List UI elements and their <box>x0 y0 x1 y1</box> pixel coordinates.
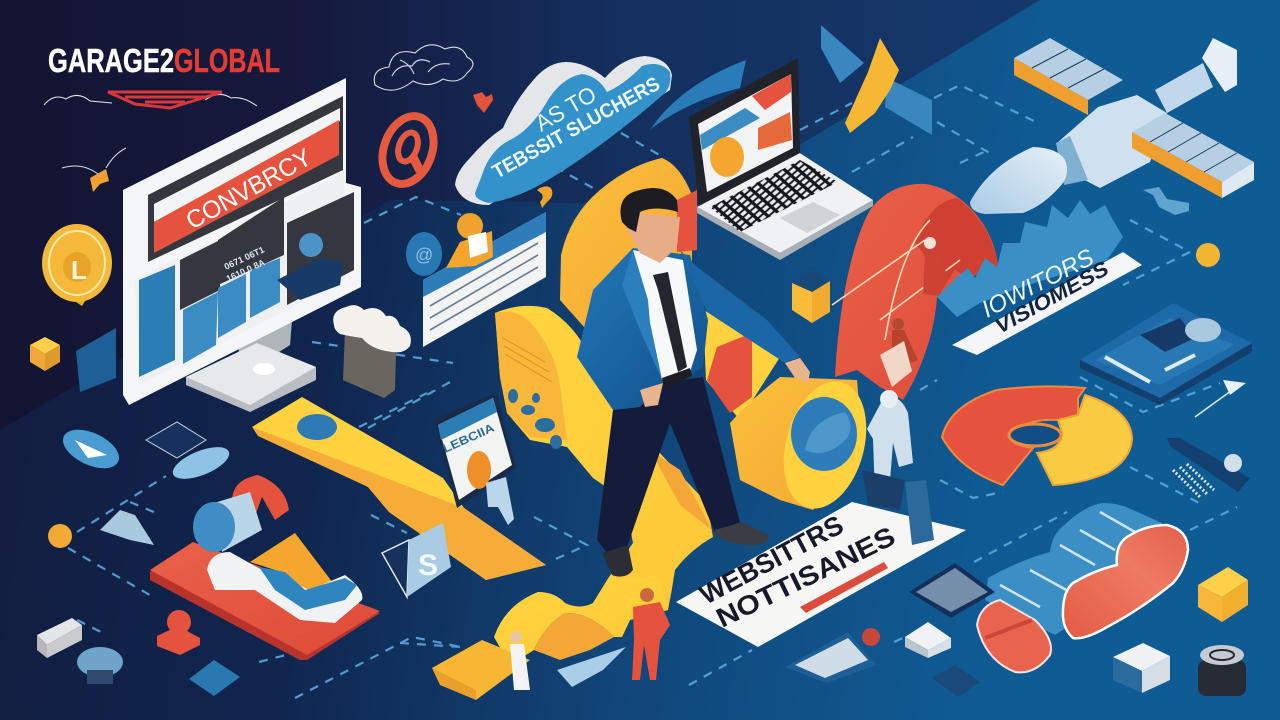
ribbon thin lines <box>832 220 960 340</box>
paper notice <box>676 502 966 647</box>
red stamp <box>157 610 200 655</box>
laptop keyboard <box>710 160 838 232</box>
white box <box>37 618 82 658</box>
red cylinder <box>977 600 1051 672</box>
icon: at circle: @ <box>415 245 433 265</box>
small drive <box>932 665 980 697</box>
monitor dashboard cards <box>180 192 354 364</box>
bottom yellow ribbon <box>432 577 668 700</box>
cloud text: TEBSSIT SLUCHERS <box>489 73 664 183</box>
satellite neck <box>1056 136 1088 185</box>
white chip box <box>905 622 951 658</box>
cylinder end ring <box>771 372 879 518</box>
paper machine strip <box>905 480 934 545</box>
monitor red banner <box>154 120 339 253</box>
icon: paper plane <box>1195 380 1246 417</box>
person shoes <box>602 522 768 577</box>
document slab <box>785 632 876 683</box>
icon: blue plane blob <box>1143 187 1189 215</box>
small red chip <box>862 628 880 646</box>
laptop trackpad <box>780 202 840 233</box>
cloud side <box>455 56 672 205</box>
yellow cylinder with blue disc <box>703 310 879 518</box>
monitor <box>123 78 361 412</box>
logo underline sketch <box>44 92 257 108</box>
cloud striped body <box>985 503 1170 635</box>
person trousers <box>597 377 740 553</box>
pie yellow slice <box>1037 395 1132 485</box>
laptop <box>689 58 873 260</box>
paper notice: WEBSITTRS <box>695 510 848 610</box>
monitor stand <box>186 320 316 412</box>
platform white object <box>207 552 362 623</box>
suitcase <box>432 640 530 700</box>
laptop base <box>697 150 873 253</box>
yellow arch <box>560 158 692 345</box>
small figures lower <box>880 318 918 387</box>
logo: GLOBAL <box>174 42 280 79</box>
cylinder body <box>730 377 863 510</box>
blue disc <box>791 397 857 471</box>
person head <box>620 188 680 263</box>
sketch cloud <box>374 45 473 90</box>
icon: red at symbol <box>373 109 443 191</box>
left small icons <box>48 422 233 548</box>
pale leaf <box>169 441 233 485</box>
red inset <box>707 333 752 413</box>
cloud face <box>475 64 670 203</box>
icon: at circle <box>406 232 442 276</box>
lower right cloud <box>977 503 1188 672</box>
icon: yellow cube <box>30 337 60 371</box>
satellite upper array <box>1014 38 1123 115</box>
upper yellow plate <box>703 310 780 420</box>
gold ball <box>48 524 72 548</box>
platform blue cylinder <box>193 492 262 552</box>
server cubes <box>1113 643 1170 693</box>
satellite body <box>1057 95 1167 188</box>
red ribbon <box>832 184 998 400</box>
satellite arm and end <box>1155 38 1237 113</box>
small tablet with reader: LEBCIIA <box>441 420 497 456</box>
blue splash <box>937 200 1123 317</box>
person jacket arm <box>680 250 800 363</box>
monitor left blue column <box>139 265 175 377</box>
red platform <box>150 475 380 660</box>
S book: S <box>418 549 438 582</box>
yellow box <box>1198 567 1248 622</box>
ribbon main <box>835 184 998 400</box>
blue pebbles <box>508 389 562 449</box>
pie chart <box>942 386 1132 485</box>
yellow block and river <box>495 306 713 637</box>
S book <box>382 523 451 597</box>
ribbon inner arch <box>534 613 614 660</box>
person hands <box>640 358 810 407</box>
monitor frame <box>123 78 361 405</box>
small figure on suitcase <box>510 631 530 690</box>
right small gadget <box>1167 438 1250 497</box>
monitor dashboard cards: 0671 06T1 <box>223 245 266 272</box>
person jacket back <box>577 248 708 410</box>
icon: coil device <box>1198 645 1246 696</box>
small figure on ribbon <box>923 237 949 296</box>
person lapel <box>622 250 662 380</box>
monitor body white <box>135 172 346 385</box>
icon: blue panel <box>76 328 116 392</box>
blue device panel <box>1080 303 1252 405</box>
platform blue limb <box>259 567 357 610</box>
blue card <box>189 660 240 696</box>
visitors banner: IOWITORS <box>977 244 1098 323</box>
logo: GARAGE2 <box>48 42 174 79</box>
blue wing behind cloud <box>650 60 746 130</box>
icon: gold coin: L <box>71 255 87 285</box>
browser window <box>423 212 546 347</box>
laptop screen <box>698 74 793 192</box>
person in browser <box>446 213 493 268</box>
dark card <box>146 422 206 458</box>
icon: small gold ball <box>1196 243 1220 267</box>
yellow road <box>252 397 546 580</box>
icon: orange ear <box>537 186 552 208</box>
blue stack <box>77 647 123 684</box>
cloud red face <box>1063 525 1188 638</box>
small tablet with reader <box>434 392 516 525</box>
small satellite <box>821 25 932 135</box>
ribbon inner dark <box>915 198 998 285</box>
ribbon orange fold <box>650 450 712 530</box>
icon: small orange bird <box>62 148 126 192</box>
laptop lid <box>689 58 800 206</box>
monitor dashboard cards: 1610 0 8A <box>225 257 267 284</box>
person shirt <box>633 250 697 380</box>
platform red handle <box>232 475 289 530</box>
orange block side <box>495 312 567 440</box>
technicians group <box>862 390 913 510</box>
red arch piece <box>677 190 697 252</box>
worker in orange <box>632 588 670 680</box>
keyboard grid <box>909 563 995 618</box>
blue leaf <box>57 422 125 476</box>
pie centre hole <box>1009 424 1061 446</box>
cloud text: AS TO <box>530 81 601 136</box>
person <box>577 188 810 577</box>
yellow package cube <box>792 270 830 323</box>
shoe <box>100 510 154 545</box>
lower left devices <box>37 610 240 696</box>
visitors banner: VISIOMESS <box>991 257 1113 338</box>
satellite <box>970 38 1254 214</box>
pie red slice <box>942 386 1085 485</box>
monitor red banner: CONVBRCY <box>181 143 317 235</box>
dashed connector lines <box>68 85 1237 698</box>
satellite nose <box>970 147 1067 214</box>
platform orange object <box>250 533 336 590</box>
blue white items <box>557 647 626 687</box>
person tie <box>653 272 687 372</box>
icon: small red heart <box>473 92 493 113</box>
monitor white header strip <box>154 108 340 222</box>
person belt <box>662 368 692 388</box>
icon: gold coin <box>42 224 112 306</box>
satellite lower array <box>1132 113 1254 198</box>
visitors banner <box>952 244 1142 355</box>
cloud heading <box>455 56 672 205</box>
orange side lines <box>503 338 552 382</box>
big yellow ribbon behind person <box>495 158 713 637</box>
white cloud with dark block <box>333 305 411 398</box>
paper notice: NOTTISANES <box>711 521 900 633</box>
monitor bezel <box>148 96 343 262</box>
